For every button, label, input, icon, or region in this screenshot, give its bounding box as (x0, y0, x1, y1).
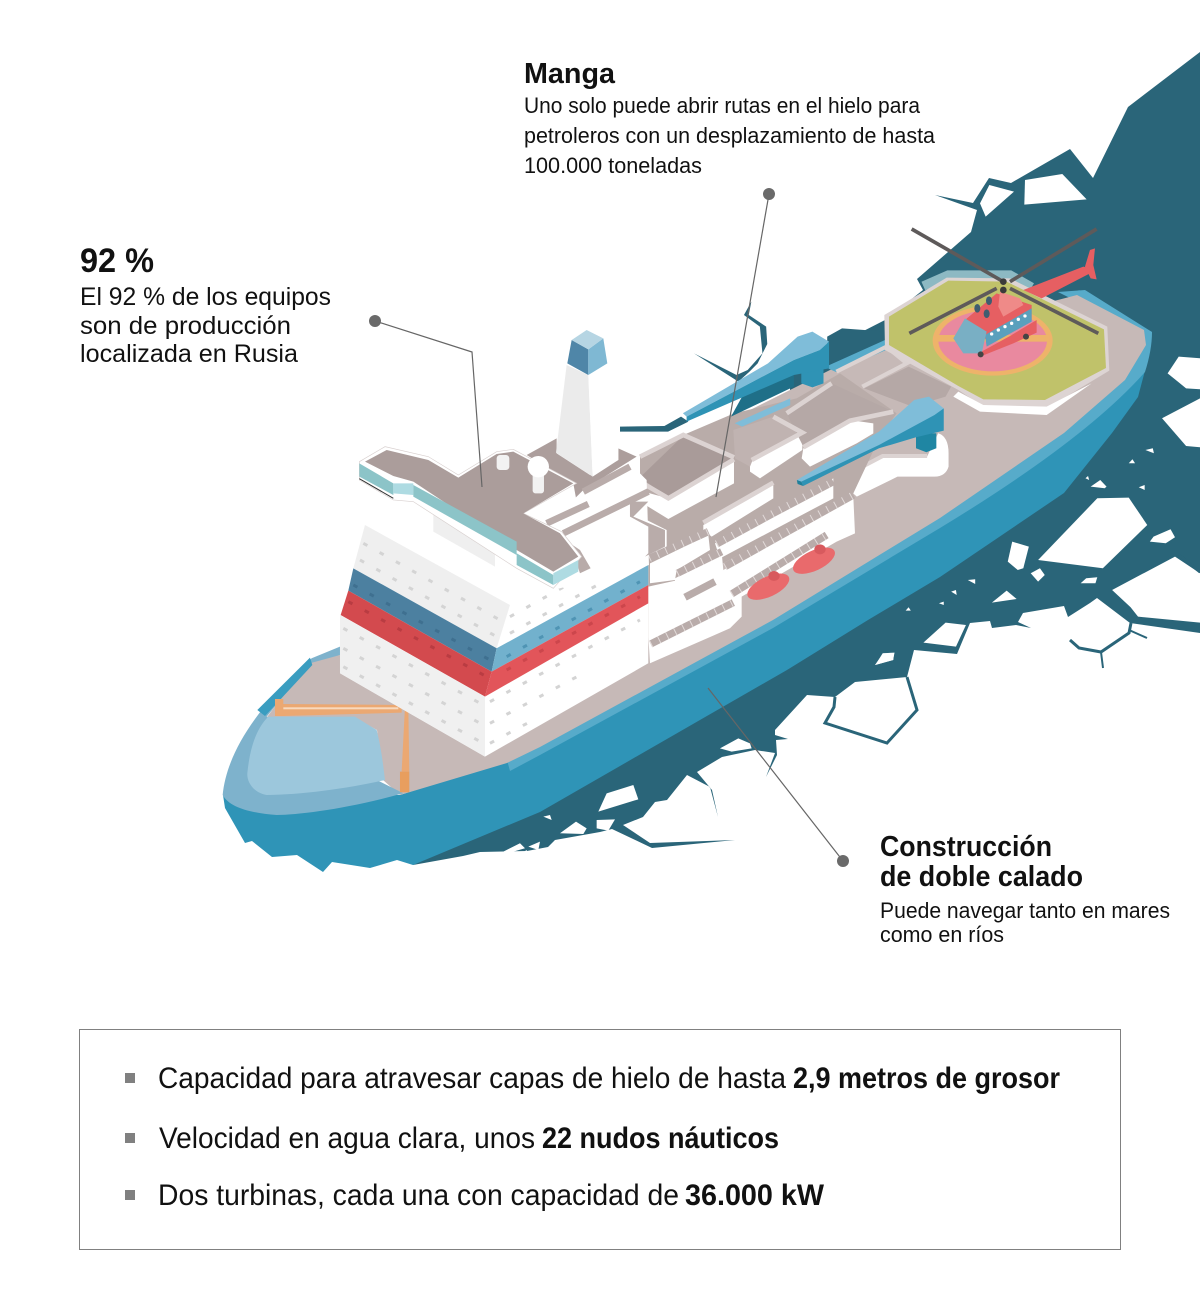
callout: Construcción de doble calado: de doble calado (880, 861, 1083, 893)
ship hull (223, 290, 1152, 872)
rear deck (527, 438, 637, 502)
callout: Manga (524, 58, 936, 178)
callout: Manga: Uno solo puede abrir rutas en el hielo para (524, 93, 921, 118)
leader line: Construcción (708, 688, 849, 867)
wheels (978, 334, 1029, 357)
bridge stripes (359, 463, 578, 585)
helipad rail back (923, 275, 1032, 287)
fact: speed: 22 nudos náuticos (542, 1122, 779, 1155)
pale railings (640, 383, 893, 523)
landing circle (933, 306, 1053, 376)
lifeboat one (744, 568, 793, 605)
mid superstructure (640, 373, 897, 663)
bridge roof (365, 450, 578, 572)
helicopter (909, 229, 1098, 357)
callout: Construcción de doble calado: Construcción (880, 831, 1052, 863)
callout: Construcción de doble calado: como en ríos (880, 922, 1004, 947)
leader line: 92 % (369, 315, 482, 487)
lifeboat two (789, 542, 839, 579)
fact: ice thickness: 2,9 metros de grosor (793, 1062, 1060, 1095)
window strip (985, 308, 1032, 347)
panel: key facts (80, 1030, 1120, 1250)
ice and dark water field (413, 52, 1200, 865)
lower skirt (978, 320, 1037, 356)
railing posts (649, 482, 853, 644)
red stripe left (341, 591, 492, 697)
bow rail stripe (257, 658, 312, 716)
upper left wall (353, 525, 510, 648)
red stripe right (485, 585, 648, 697)
fuselage (965, 293, 1032, 340)
callout: 92 % (80, 242, 331, 368)
callout: 92 %: El 92 % de los equipos (80, 283, 331, 311)
callout: 92 %: 92 % (80, 242, 154, 280)
funnel cap (567, 330, 607, 375)
tail boom (1023, 267, 1090, 298)
bridge white edge (359, 447, 582, 588)
helipad white base (953, 383, 1092, 415)
cockpit (953, 318, 987, 353)
callout: 92 %: localizada en Rusia (80, 340, 298, 368)
bridge and funnel (359, 330, 665, 590)
block two (733, 417, 802, 467)
leader line: Manga (716, 188, 775, 497)
helipad platform (884, 278, 1109, 408)
bow rim (223, 647, 403, 815)
window marks (343, 543, 640, 743)
block one roof (640, 436, 734, 497)
blue stripe left (348, 568, 497, 672)
callout: Manga: 100.000 toneladas (524, 153, 702, 178)
fact: speed: Velocidad en agua clara, unos (159, 1122, 535, 1155)
helipad surface (889, 281, 1106, 400)
port boom (683, 332, 829, 427)
callout: 92 %: son de producción (80, 312, 291, 340)
bow (223, 647, 409, 815)
rotor (909, 229, 1098, 333)
white long blocks (640, 478, 855, 663)
hull edge band (507, 290, 1152, 771)
port hull edge (825, 340, 886, 372)
ice floes bottom (503, 653, 894, 857)
fact: turbines: Dos turbinas, cada una con capacidad de (158, 1179, 679, 1212)
aft panel railing (836, 347, 907, 387)
callout: Manga: petroleros con un desplazamiento de hasta (524, 123, 936, 148)
wheelhouse shadow deck (570, 543, 591, 573)
deck (267, 295, 1146, 795)
forward block (340, 477, 648, 757)
bow pool (247, 717, 385, 795)
callout: Construcción de doble calado (880, 831, 1170, 947)
mid deck base (640, 373, 897, 603)
white superstructure (340, 477, 648, 757)
gray railing strips (649, 482, 853, 644)
callout: Construcción de doble calado: Puede navegar tanto en mares (880, 898, 1170, 923)
ice floes right (875, 357, 1200, 665)
cracks in the ice (825, 555, 1200, 743)
block three (787, 383, 893, 447)
tail fin (1085, 248, 1097, 279)
aft deck panels (836, 347, 951, 497)
white funnel (556, 365, 593, 477)
dome and mast (497, 455, 549, 493)
orange crane (275, 699, 409, 792)
helipad (884, 275, 1109, 415)
railings behind bridge (547, 467, 648, 533)
ice floes top (980, 174, 1087, 217)
callout: Manga: Manga (524, 58, 616, 90)
blue stripe right (492, 565, 648, 672)
fact: turbines: 36.000 kW (685, 1179, 825, 1212)
block one wall (640, 459, 734, 519)
fact: ice thickness: Capacidad para atravesar capas de hielo de hasta (158, 1062, 786, 1095)
fact: speed (125, 1122, 779, 1155)
cranes (683, 332, 944, 486)
curved white aft block (838, 433, 949, 497)
lower left wall (340, 615, 485, 757)
white block behind bridge (553, 463, 649, 590)
cracks near the port boom (620, 302, 886, 432)
engines (974, 296, 992, 318)
starboard boom (797, 397, 944, 486)
aft panel near helipad (864, 367, 951, 407)
aft block rail (838, 456, 927, 479)
underside wall (433, 513, 495, 567)
gray strip behind bridge (630, 502, 665, 557)
